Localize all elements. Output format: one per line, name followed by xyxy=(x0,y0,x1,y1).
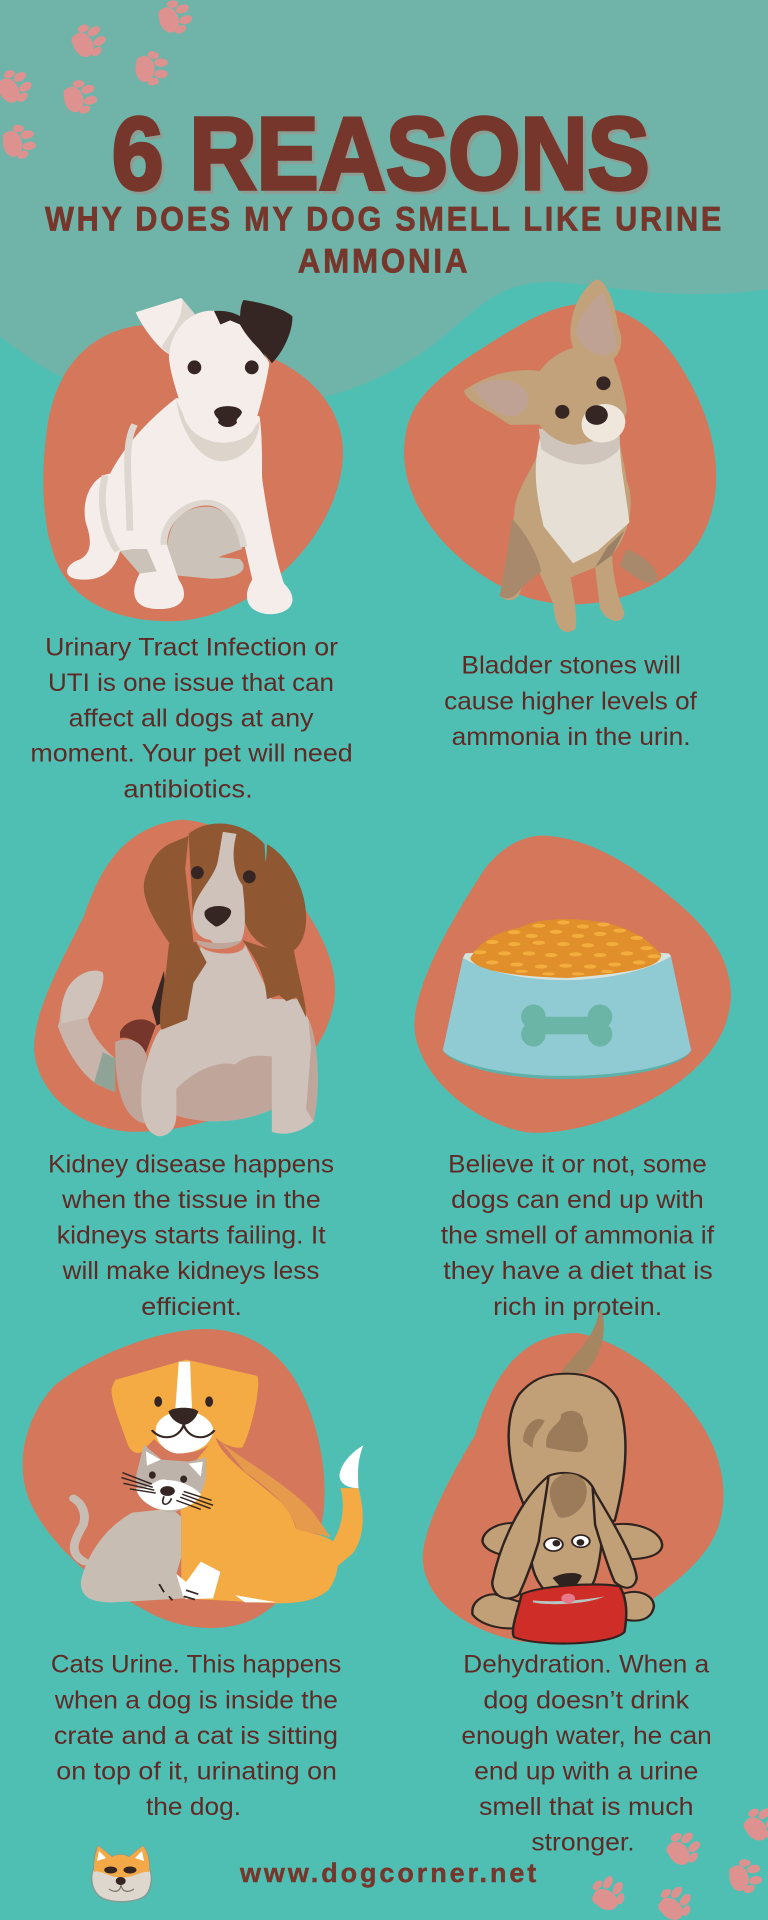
reason 1 text: moment. Your pet will need xyxy=(30,740,353,768)
blob: reason 5 xyxy=(23,1329,325,1628)
paw prints: bottom right xyxy=(584,1800,768,1920)
reason 3 text: will make kidneys less xyxy=(62,1257,319,1285)
reason 5 text: when a dog is inside the xyxy=(54,1687,338,1715)
reason 1 text: UTI is one issue that can xyxy=(48,669,334,697)
reason 2 text xyxy=(444,652,697,751)
reason 2 text: ammonia in the urin. xyxy=(452,723,691,751)
icon: shiba logo xyxy=(92,1846,151,1902)
blob: reason 1 xyxy=(43,325,343,621)
reason 5 text: the dog. xyxy=(146,1793,241,1821)
top wave panel xyxy=(0,0,768,406)
reason 1 text: antibiotics. xyxy=(123,776,253,804)
reason 3 text: when the tissue in the xyxy=(61,1186,321,1214)
reason 5 text: Cats Urine. This happens xyxy=(51,1651,341,1679)
title: 6 REASONS xyxy=(112,96,650,211)
reason 1 text: Urinary Tract Infection or xyxy=(45,634,338,662)
blob: reason 3 xyxy=(34,820,335,1132)
illustration: dog and cat xyxy=(73,1360,363,1603)
reason 6 text: enough water, he can xyxy=(461,1722,712,1750)
illustration: chihuahua xyxy=(464,279,657,632)
reason 4 text: they have a diet that is xyxy=(443,1257,713,1285)
illustration: hound drinking xyxy=(472,1307,662,1644)
reason 2 text: Bladder stones will xyxy=(461,652,681,680)
illustration: food bowl xyxy=(443,919,691,1079)
reason 5 text: crate and a cat is sitting xyxy=(54,1722,338,1750)
illustration: white puppy xyxy=(67,298,292,614)
reason 5 text: on top of it, urinating on xyxy=(56,1758,337,1786)
illustration: spaniel xyxy=(58,824,318,1136)
subtitle: AMMONIA xyxy=(298,243,470,281)
reason 4 text: rich in protein. xyxy=(493,1293,662,1321)
website footer: www.dogcorner.net xyxy=(239,1858,536,1888)
reason 4 text: dogs can end up with xyxy=(451,1186,704,1214)
reason 6 text: end up with a urine xyxy=(474,1758,698,1786)
reason 4 text: the smell of ammonia if xyxy=(441,1222,714,1250)
reason 3 text xyxy=(48,1151,334,1321)
reason 3 text: Kidney disease happens xyxy=(48,1151,334,1179)
reason 6 text xyxy=(461,1651,712,1857)
reason 1 text: affect all dogs at any xyxy=(69,704,314,732)
subtitle xyxy=(45,201,724,281)
reason 2 text: cause higher levels of xyxy=(444,687,697,715)
blob: reason 4 xyxy=(414,836,731,1133)
reason 1 text xyxy=(30,634,353,804)
title: 6 REASONS xyxy=(115,99,653,214)
reason 6 text: Dehydration. When a xyxy=(463,1651,709,1679)
reason 4 text xyxy=(441,1151,714,1321)
reason 6 text: smell that is much xyxy=(479,1793,694,1821)
blob: reason 6 xyxy=(423,1333,723,1642)
reason 6 text: dog doesn’t drink xyxy=(483,1687,690,1715)
reason 5 text xyxy=(51,1651,341,1821)
reason 3 text: efficient. xyxy=(141,1293,242,1321)
reason 6 text: stronger. xyxy=(531,1829,635,1857)
blob: reason 2 xyxy=(404,304,716,604)
reason 3 text: kidneys starts failing. It xyxy=(57,1222,326,1250)
paw prints: top left xyxy=(0,0,196,163)
reason 4 text: Believe it or not, some xyxy=(448,1151,707,1179)
